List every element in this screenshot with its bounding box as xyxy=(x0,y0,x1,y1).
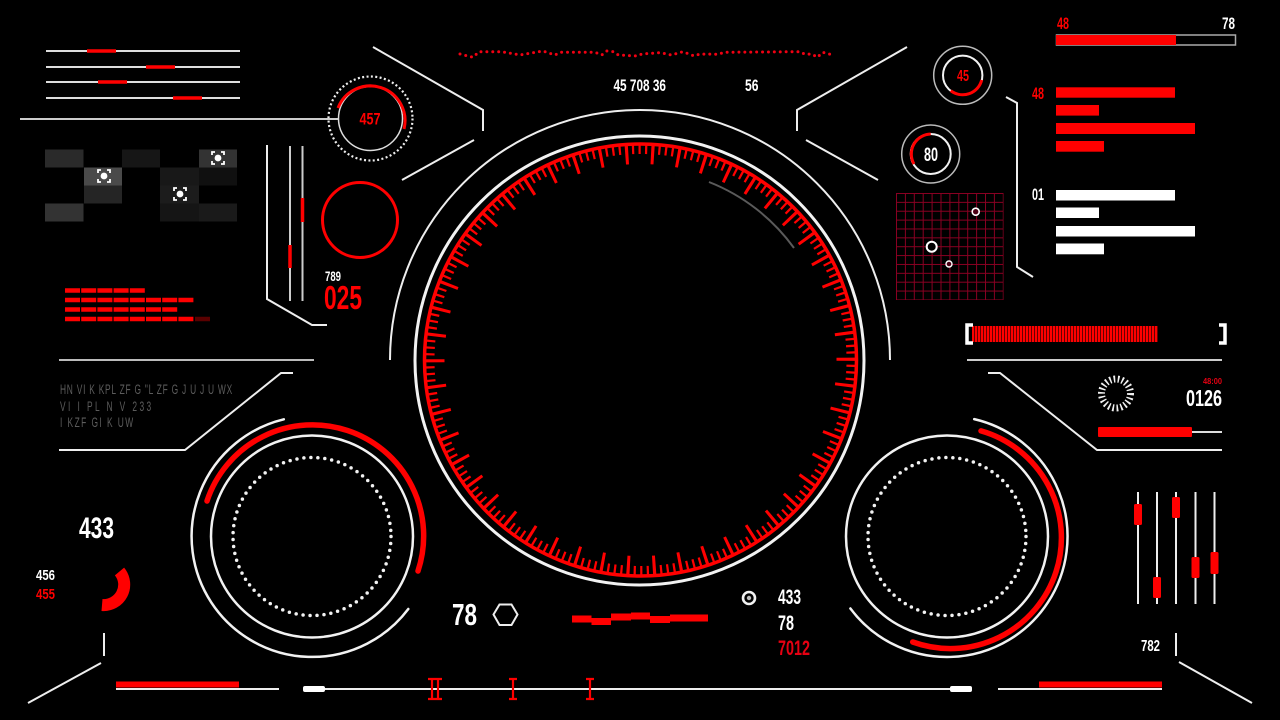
bottom timeline xyxy=(303,679,972,699)
white bar chart xyxy=(1032,185,1195,254)
top center numbers: 45 708 36 xyxy=(614,76,666,95)
red markers xyxy=(428,679,594,699)
dial 80: 80 xyxy=(924,145,938,166)
dial 457 xyxy=(20,76,412,160)
readout 0126 xyxy=(1186,377,1223,411)
gray inner arc xyxy=(709,182,794,248)
left readouts: 433 xyxy=(79,512,114,545)
bottom left corner xyxy=(28,633,104,703)
checker matrix xyxy=(45,150,237,222)
red bar chart: 48 xyxy=(1032,84,1044,103)
progress bar top right: 48 xyxy=(1057,14,1069,33)
readouts 433 78 7012 xyxy=(778,586,810,660)
radar grid xyxy=(896,193,1004,300)
right bracket xyxy=(1006,97,1033,277)
left readouts xyxy=(36,512,114,603)
dial 80 xyxy=(902,125,960,183)
value 78 with hexagon: 78 xyxy=(452,597,477,632)
hatched level bar xyxy=(967,325,1225,343)
dial 457: 457 xyxy=(360,110,380,128)
bottom left bar xyxy=(116,682,279,689)
left gauge xyxy=(192,419,424,657)
target icon xyxy=(212,152,224,164)
red thick arc xyxy=(102,572,124,605)
angled frame right xyxy=(988,373,1222,450)
vertical sliders xyxy=(1134,492,1218,604)
top center numbers: 56 xyxy=(745,76,758,95)
progress bar top right: 78 xyxy=(1222,14,1235,33)
red segmented bars xyxy=(65,290,210,319)
divider left xyxy=(59,359,314,361)
white bar chart: 01 xyxy=(1032,185,1044,204)
dial 45: 45 xyxy=(957,68,969,85)
readout 789 025 xyxy=(324,268,362,316)
gray text block: I KZF GI K UW xyxy=(60,416,133,431)
top center numbers xyxy=(614,76,758,95)
bottom right bar xyxy=(998,682,1162,689)
target icon small xyxy=(743,592,755,604)
right gauge xyxy=(846,419,1068,657)
red bar chart xyxy=(1032,84,1195,152)
readouts 433 78 7012: 7012 xyxy=(778,637,810,660)
red step bars xyxy=(572,612,708,625)
angled frame left xyxy=(59,373,293,450)
left readouts: 455 xyxy=(36,586,55,603)
minor ticks xyxy=(429,148,852,572)
readout 789 025: 025 xyxy=(324,279,362,316)
progress bar top right xyxy=(1056,14,1236,45)
red gauge ring xyxy=(424,144,856,576)
gray text block: VI I PL N V 233 xyxy=(60,400,151,415)
readouts 433 78 7012: 78 xyxy=(778,612,794,635)
slider lines top left xyxy=(46,51,240,98)
gray text block xyxy=(60,383,232,431)
readout 782: 782 xyxy=(1141,638,1160,655)
target icon xyxy=(98,170,110,182)
red circle xyxy=(322,182,398,258)
readout 0126: 0126 xyxy=(1186,385,1222,411)
spinner icon xyxy=(1102,379,1130,408)
top corner brackets xyxy=(373,47,907,180)
target icon xyxy=(174,188,186,200)
readout 0126: 48:00 xyxy=(1203,377,1223,386)
central gauge xyxy=(390,110,890,585)
outer arc xyxy=(390,110,890,360)
readouts 433 78 7012: 433 xyxy=(778,586,801,609)
left readouts: 456 xyxy=(36,567,55,584)
gray text block: HN VI K KPL ZF G "L ZF G J U J U WX xyxy=(60,383,232,398)
major ticks xyxy=(434,153,847,567)
white gauge ring xyxy=(415,136,864,585)
bottom right corner xyxy=(1176,633,1252,703)
value 78 with hexagon xyxy=(452,597,518,632)
readout 789 025: 789 xyxy=(325,268,341,284)
vertical rails xyxy=(267,145,327,325)
divider right xyxy=(967,359,1222,361)
top red dotted waveform xyxy=(460,51,830,57)
dial 45 xyxy=(934,46,992,104)
small progress bar xyxy=(1098,427,1222,437)
